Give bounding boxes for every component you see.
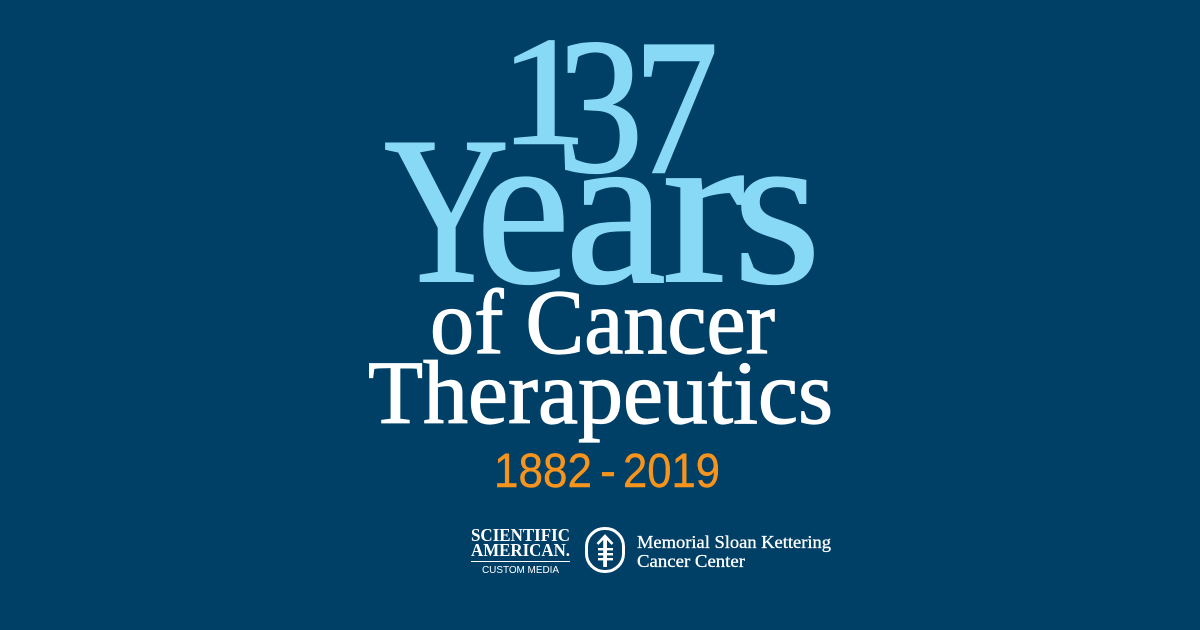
title: Years bbox=[384, 84, 821, 331]
subtitle: Therapeutics: Therapeutics bbox=[368, 344, 833, 443]
title: Years: s bbox=[733, 85, 821, 331]
logo: Memorial Sloan Kettering wordmark: Cancer Center bbox=[637, 551, 745, 571]
title: Years: r bbox=[662, 84, 745, 330]
title: 137: 7 bbox=[634, 0, 718, 214]
date range: 2019 bbox=[623, 445, 720, 498]
date range: - bbox=[600, 445, 616, 498]
logo: Memorial Sloan Kettering wordmark bbox=[637, 532, 831, 571]
logo: Scientific American Custom Media: SCIENTIFIC bbox=[471, 525, 570, 545]
logo: Memorial Sloan Kettering icon bbox=[586, 528, 624, 572]
logo: Scientific American Custom Media: CUSTOM MEDIA bbox=[482, 565, 559, 576]
subtitle: of Cancer: of Cancer bbox=[430, 271, 775, 373]
title: 137: 1 bbox=[500, 7, 587, 177]
date range bbox=[494, 445, 720, 498]
title: Years: Y bbox=[384, 95, 509, 327]
title: 137: 3 bbox=[557, 0, 643, 213]
logo: Scientific American Custom Media bbox=[471, 525, 570, 576]
date range: 1882 bbox=[494, 445, 592, 498]
logo: Scientific American Custom Media: AMERICAN. bbox=[471, 540, 570, 560]
title: Years: a bbox=[565, 85, 666, 331]
title: 137 bbox=[500, 0, 718, 214]
logo: Memorial Sloan Kettering wordmark: Memorial Sloan Kettering bbox=[637, 532, 831, 552]
title: Years: e bbox=[476, 85, 570, 331]
